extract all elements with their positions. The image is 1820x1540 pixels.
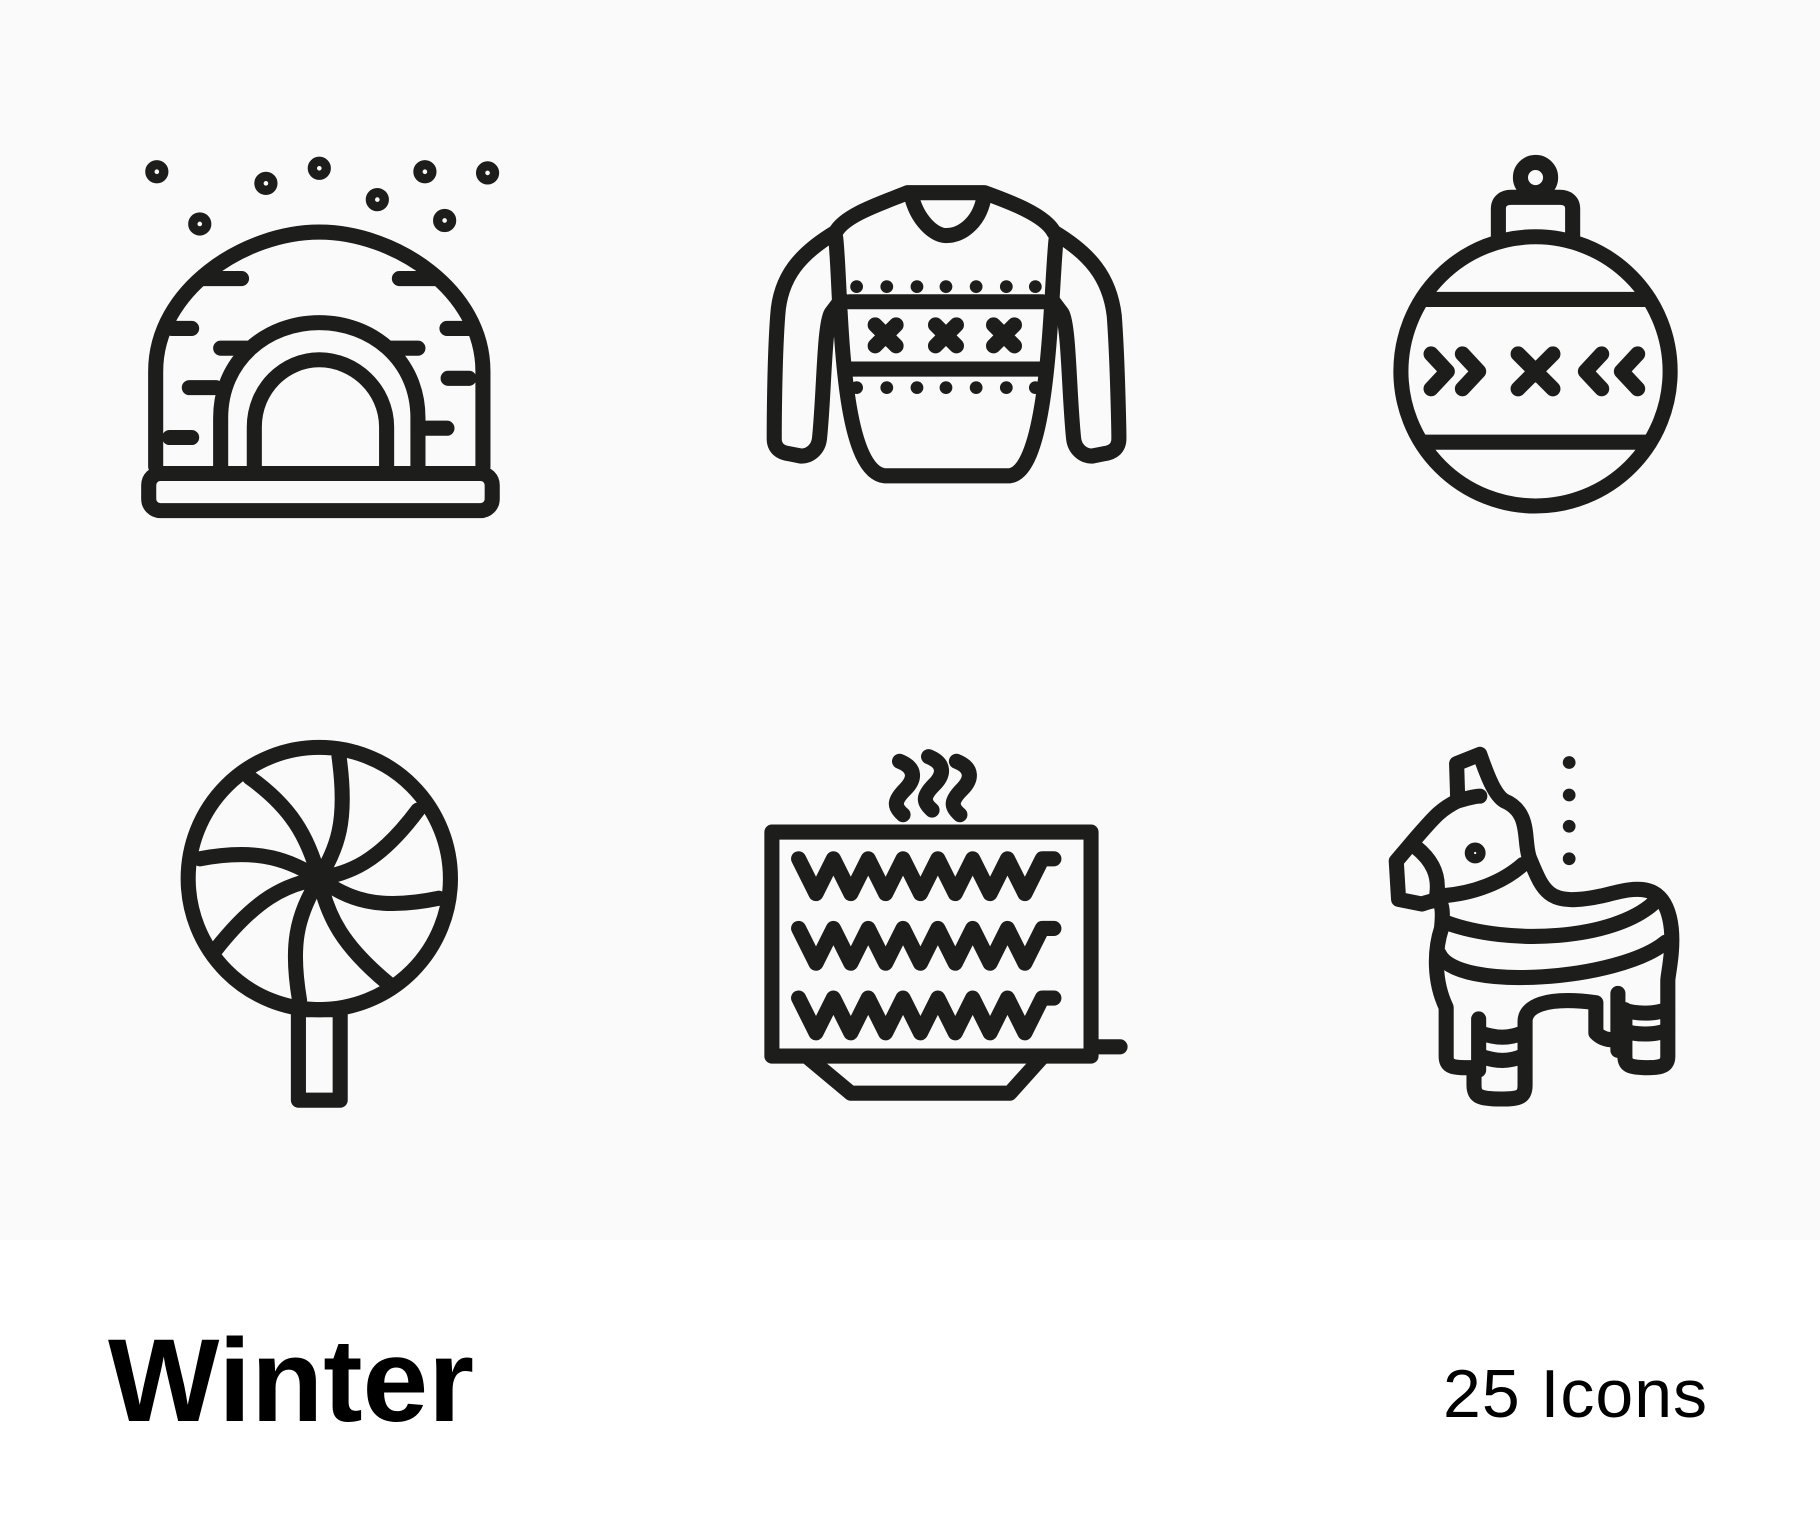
icon: ornament — [1401, 162, 1670, 506]
icon: igloo — [149, 161, 495, 511]
subtitle: icon count: 25 Icons — [1443, 1356, 1708, 1432]
icon: lollipop — [188, 747, 450, 1100]
icon: sweater — [774, 193, 1119, 476]
icon: pinata llama — [1396, 754, 1672, 1099]
icon: steaming cake — [772, 757, 1120, 1093]
title: Winter — [108, 1315, 474, 1447]
